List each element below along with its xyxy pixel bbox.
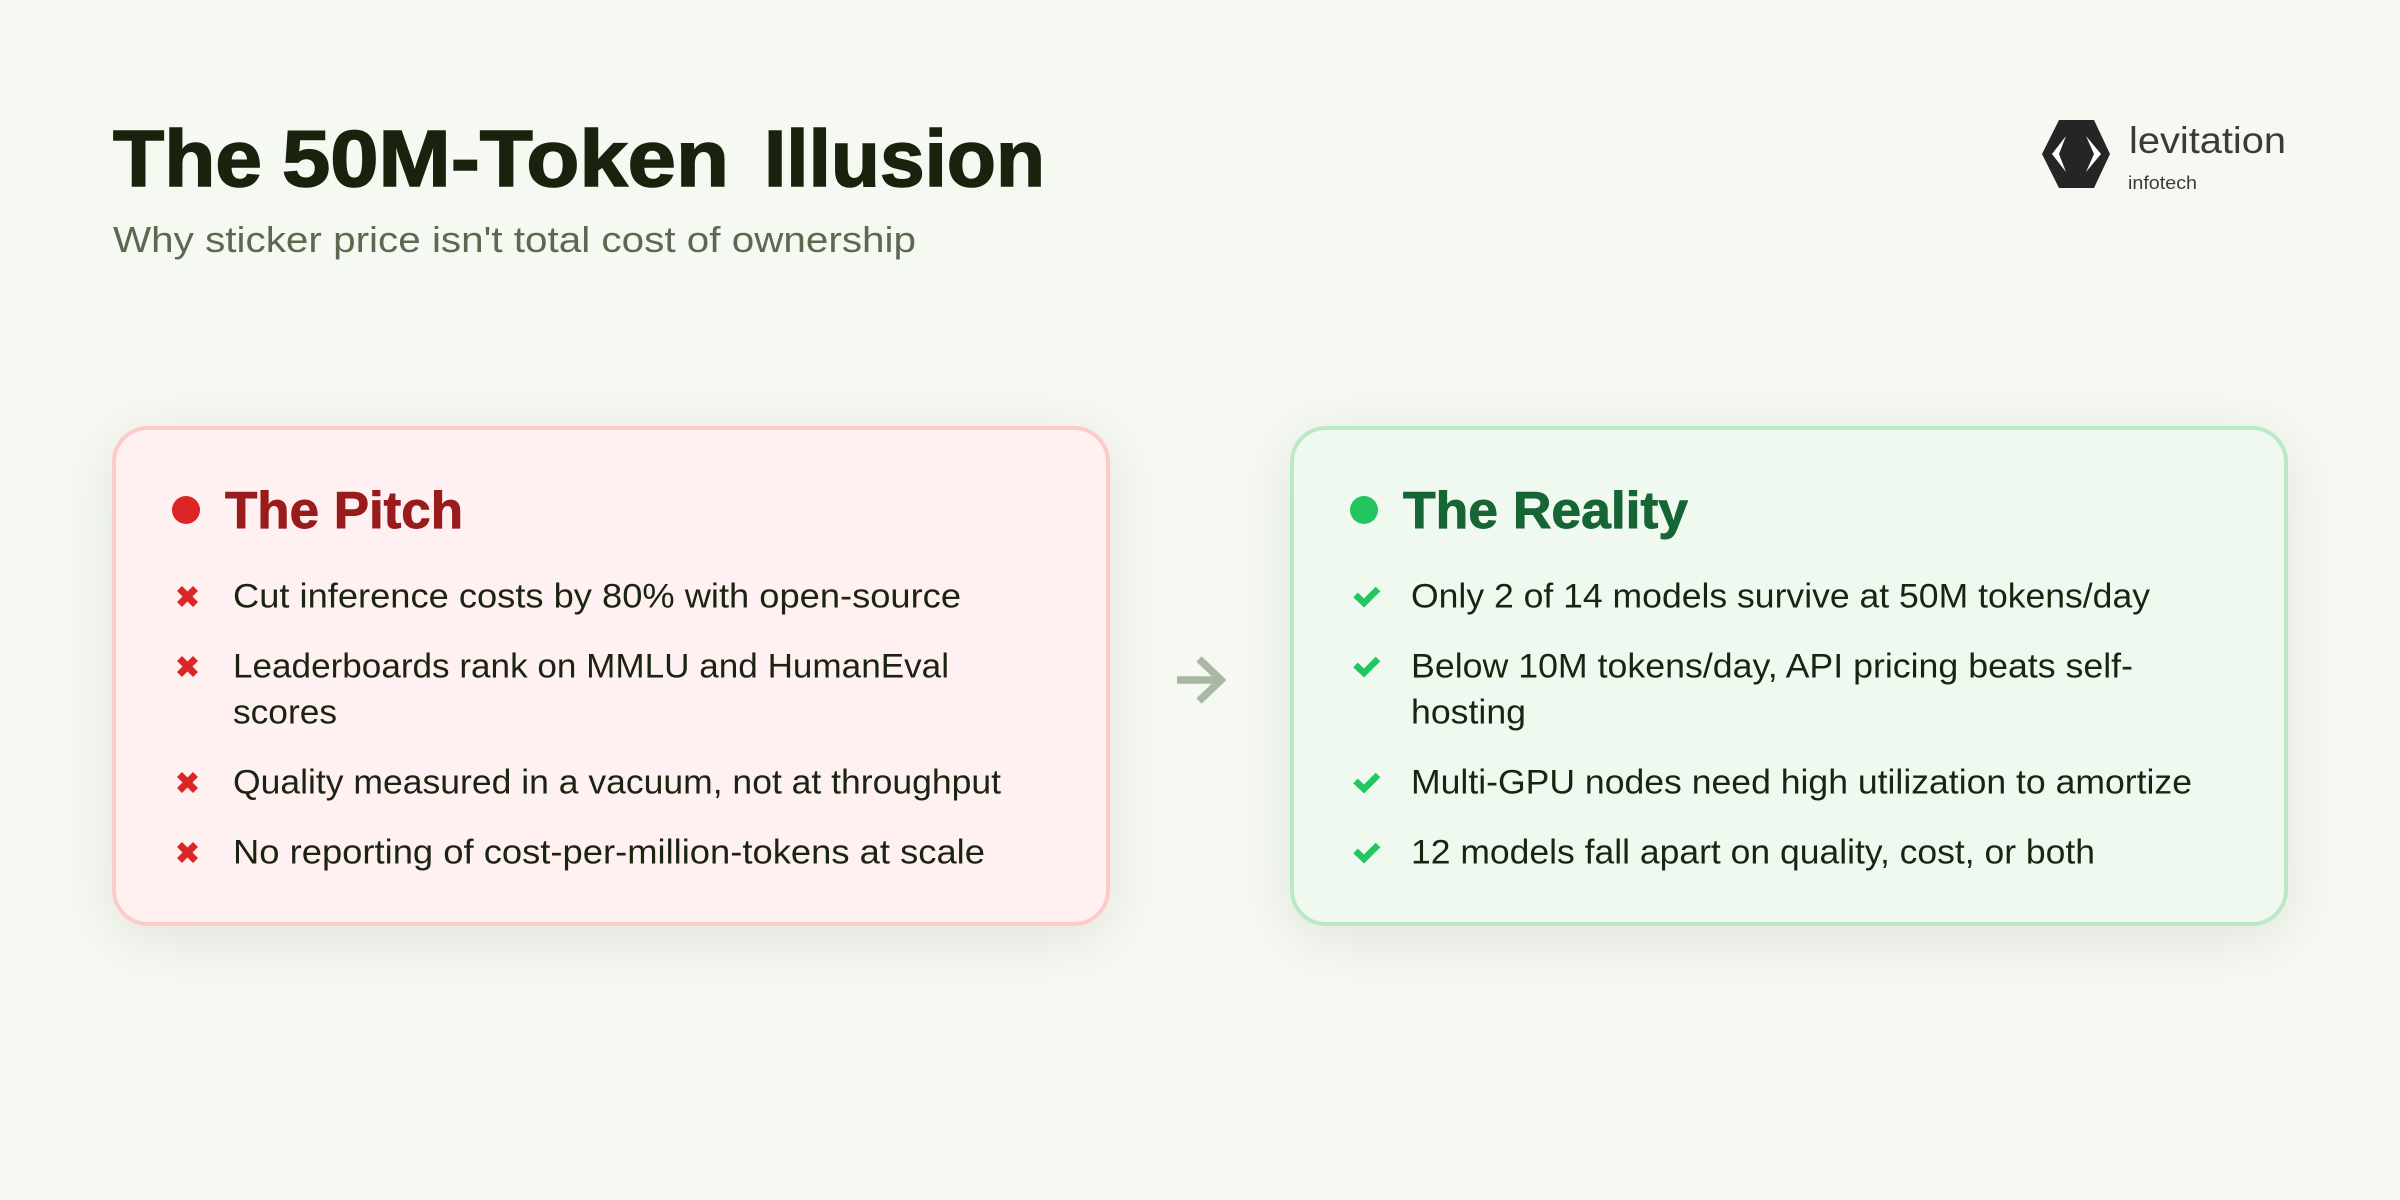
logo wordmark: levitation (2129, 120, 2286, 161)
list item 2 (1356, 648, 2133, 732)
list item 2 (180, 648, 949, 732)
title: The (113, 114, 262, 203)
list item 4: No reporting of cost-per-million-tokens at scale (233, 834, 985, 872)
arrow (1177, 656, 1226, 704)
title: 50M-Token (282, 114, 729, 203)
list item 3: Multi-GPU nodes need high utilization to amortize (1411, 764, 2192, 802)
list item 1: Only 2 of 14 models survive at 50M tokens/day (1411, 578, 2150, 616)
heading: the pitch: The Pitch (225, 482, 463, 540)
list item 2: scores (233, 694, 337, 732)
subtitle: Why sticker price isn't total cost of ownership (113, 219, 916, 260)
logo: levitation infotech (2042, 120, 2286, 193)
list item 4: 12 models fall apart on quality, cost, or both (1411, 834, 2095, 872)
header: title and subtitle (113, 114, 1045, 260)
icon: hexagon with chevrons (2042, 120, 2110, 188)
panel: the pitch (112, 426, 1110, 926)
list item 2: hosting (1411, 694, 1526, 732)
title: Illusion (764, 114, 1045, 203)
status dot: green (1350, 496, 1378, 524)
list item 2: Leaderboards rank on MMLU and HumanEval (233, 648, 949, 686)
list item 3: Quality measured in a vacuum, not at throughput (233, 764, 1002, 802)
panel: the reality (1290, 426, 2288, 926)
heading: the reality: The Reality (1403, 482, 1688, 540)
list item 2: Below 10M tokens/day, API pricing beats self- (1411, 648, 2133, 686)
logo subtext: infotech (2128, 173, 2197, 193)
list item 1: Cut inference costs by 80% with open-source (233, 578, 961, 616)
title (113, 114, 1045, 203)
status dot: red (172, 496, 200, 524)
